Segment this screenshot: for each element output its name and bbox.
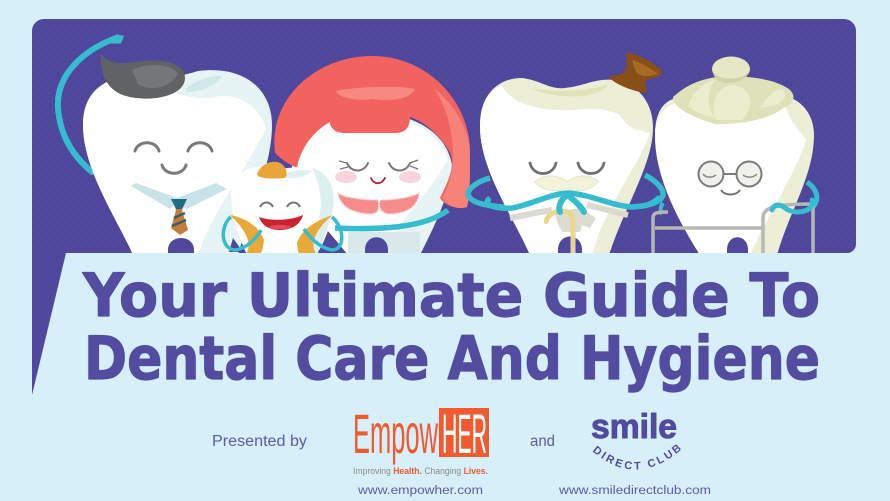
icon: child tooth	[223, 162, 342, 255]
icon: grandmother tooth	[653, 56, 817, 255]
text: and: and	[530, 433, 555, 450]
text: HER	[442, 402, 487, 465]
logo: smile direct club	[591, 408, 680, 470]
logo: smile direct club: smile	[591, 408, 677, 446]
icon: grandfather tooth	[468, 52, 663, 255]
illustration: tooth family	[58, 36, 817, 255]
link: smiledirectclub: www.smiledirectclub.com	[558, 483, 711, 497]
text: presented by: Presented by	[212, 433, 307, 450]
link: empowher: www.empowher.com	[357, 483, 483, 497]
title	[82, 261, 820, 394]
panel: purple banner	[32, 19, 856, 395]
logo: EmpowHER: Improving Health. Changing Lives.	[353, 466, 488, 477]
icon: father tooth	[58, 36, 272, 255]
logo: EmpowHER: Empow	[353, 402, 438, 465]
icon: mother tooth	[274, 56, 470, 255]
logo: EmpowHER	[353, 402, 489, 477]
title line 1: Your Ultimate Guide To	[82, 261, 820, 331]
logo: smile direct club: DIRECT CLUB	[592, 444, 680, 470]
